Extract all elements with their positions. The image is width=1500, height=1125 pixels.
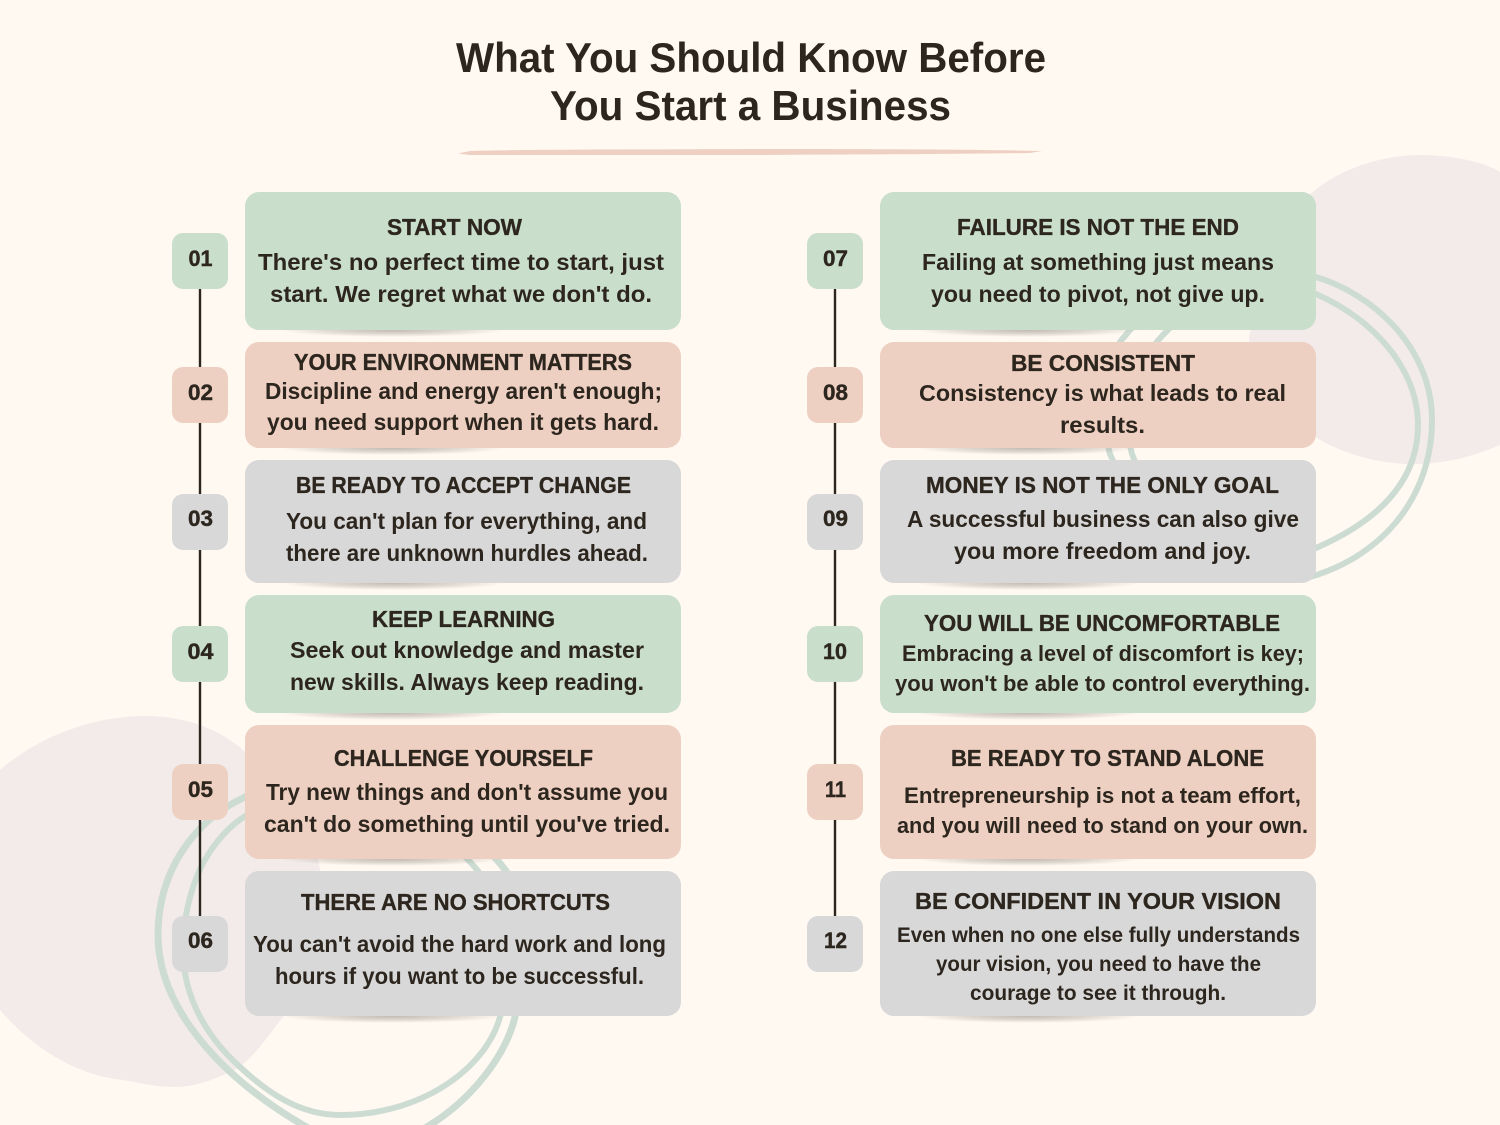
- heading: YOUR ENVIRONMENT MATTERS: [294, 349, 632, 375]
- number badge: [172, 233, 228, 289]
- body line 2: there are unknown hurdles ahead.: [286, 540, 648, 566]
- number badge: [807, 233, 863, 289]
- body line 2: you won't be able to control everything.: [895, 671, 1310, 696]
- card background: [880, 871, 1316, 1016]
- panel: item 08: [807, 342, 1316, 455]
- number badge: [172, 626, 228, 682]
- body line 1: Embracing a level of discomfort is key;: [902, 641, 1304, 666]
- panel: item 01: [172, 192, 681, 337]
- background blob: top right: [1249, 155, 1500, 464]
- body line 2: you need support when it gets hard.: [267, 409, 659, 435]
- heading: YOU WILL BE UNCOMFORTABLE: [924, 610, 1280, 636]
- panel: item 09: [807, 460, 1316, 590]
- number badge: [172, 764, 228, 820]
- body line 1: You can't avoid the hard work and long: [253, 931, 666, 957]
- body line 1: Consistency is what leads to real: [919, 380, 1286, 406]
- title: You Start a Business: [550, 82, 951, 129]
- number: 06: [188, 928, 213, 953]
- body line 2: new skills. Always keep reading.: [290, 669, 644, 695]
- number: 09: [823, 506, 848, 531]
- title: What You Should Know Before: [456, 34, 1046, 81]
- number: 11: [825, 777, 846, 802]
- number: 04: [188, 639, 214, 664]
- heading: KEEP LEARNING: [372, 606, 555, 632]
- number: 01: [188, 246, 212, 271]
- panel: item 12: [807, 871, 1316, 1023]
- right timeline connector: [834, 285, 836, 940]
- panel: item 10: [807, 595, 1316, 720]
- body line 1: Entrepreneurship is not a team effort,: [904, 783, 1301, 808]
- number: 08: [823, 380, 848, 405]
- heading: BE READY TO ACCEPT CHANGE: [296, 472, 631, 498]
- number: 12: [824, 928, 847, 953]
- heading: BE CONSISTENT: [1011, 350, 1195, 376]
- heading: START NOW: [387, 214, 522, 240]
- body line 2: you more freedom and joy.: [954, 538, 1251, 564]
- number: 05: [188, 777, 213, 802]
- card background: [245, 460, 681, 583]
- body line 2: and you will need to stand on your own.: [897, 813, 1308, 838]
- card background: [245, 192, 681, 330]
- card background: [880, 725, 1316, 859]
- number badge: [807, 367, 863, 423]
- background blob: bottom left: [0, 716, 322, 1087]
- number: 07: [823, 246, 848, 271]
- panel: item 03: [172, 460, 681, 590]
- body line 1: Failing at something just means: [922, 249, 1274, 275]
- number badge: [807, 494, 863, 550]
- body line 1: Discipline and energy aren't enough;: [265, 378, 662, 404]
- card background: [880, 192, 1316, 330]
- body line 3: courage to see it through.: [970, 982, 1226, 1005]
- number: 02: [188, 380, 213, 405]
- heading: THERE ARE NO SHORTCUTS: [301, 889, 610, 915]
- body line 1: You can't plan for everything, and: [286, 508, 647, 534]
- card background: [245, 342, 681, 448]
- left timeline connector: [199, 285, 201, 940]
- title: [456, 34, 1046, 129]
- panel: item 04: [172, 595, 681, 720]
- body line 1: There's no perfect time to start, just: [258, 249, 664, 275]
- body line 2: hours if you want to be successful.: [275, 963, 644, 989]
- body line 2: results.: [1060, 412, 1145, 438]
- heading: FAILURE IS NOT THE END: [957, 214, 1239, 240]
- card background: [245, 595, 681, 713]
- body line 1: A successful business can also give: [907, 506, 1299, 532]
- body line 2: start. We regret what we don't do.: [270, 281, 652, 307]
- panel: item 02: [172, 342, 681, 455]
- number badge: [172, 916, 228, 972]
- panel: item 05: [172, 725, 681, 866]
- heading: CHALLENGE YOURSELF: [334, 745, 593, 771]
- number badge: [172, 494, 228, 550]
- card background: [245, 871, 681, 1016]
- body line 2: you need to pivot, not give up.: [931, 281, 1265, 307]
- panel: item 06: [172, 871, 681, 1023]
- card background: [245, 725, 681, 859]
- decorative rings: bottom left: [158, 784, 524, 1125]
- card background: [880, 595, 1316, 713]
- panel: item 07: [807, 192, 1316, 337]
- number badge: [807, 764, 863, 820]
- body line 1: Even when no one else fully understands: [897, 924, 1300, 947]
- title underline brush stroke: [458, 149, 1042, 155]
- number badge: [807, 626, 863, 682]
- heading: BE READY TO STAND ALONE: [951, 745, 1264, 771]
- number: 03: [188, 506, 213, 531]
- card background: [880, 342, 1316, 448]
- number: 10: [823, 639, 847, 664]
- number badge: [172, 367, 228, 423]
- decorative rings: top right: [1104, 271, 1432, 577]
- body line 1: Seek out knowledge and master: [290, 637, 644, 663]
- heading: MONEY IS NOT THE ONLY GOAL: [926, 472, 1279, 498]
- panel: item 11: [807, 725, 1316, 866]
- body line 1: Try new things and don't assume you: [266, 779, 668, 805]
- card background: [880, 460, 1316, 583]
- number badge: [807, 916, 863, 972]
- body line 2: your vision, you need to have the: [936, 953, 1261, 976]
- heading: BE CONFIDENT IN YOUR VISION: [915, 888, 1281, 914]
- body line 2: can't do something until you've tried.: [264, 811, 670, 837]
